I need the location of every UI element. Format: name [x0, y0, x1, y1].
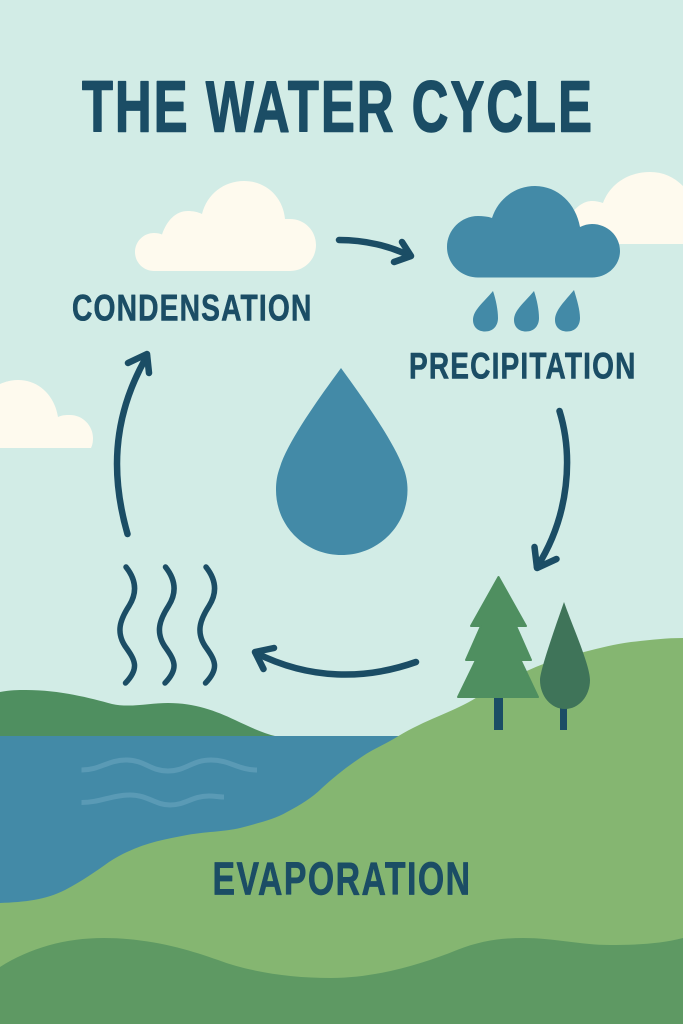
- arrow: condensation to precipitation: [339, 240, 411, 262]
- icon: central water drop: [276, 368, 408, 555]
- arrow: land to evaporation: [255, 648, 416, 675]
- foreground hill: [0, 938, 683, 1024]
- icon: evaporation waves: [120, 567, 215, 683]
- tree: conifer: [458, 577, 538, 730]
- icon: rain drops: [473, 290, 580, 332]
- label: evaporation: EVAPORATION: [212, 852, 472, 904]
- cloud: condensation: [135, 181, 316, 271]
- cloud: rain cloud: [447, 186, 620, 278]
- label: condensation: CONDENSATION: [72, 288, 312, 328]
- tree: round: [540, 602, 590, 730]
- cloud: top right background: [570, 172, 683, 244]
- water: lake: [0, 736, 420, 916]
- land: main green hill: [0, 638, 683, 1024]
- far hill: [0, 690, 277, 736]
- cloud: left background: [0, 380, 93, 448]
- arrow: condensation return: [117, 354, 149, 534]
- arrow: precipitation to land: [534, 411, 567, 568]
- water ripples: [82, 760, 257, 805]
